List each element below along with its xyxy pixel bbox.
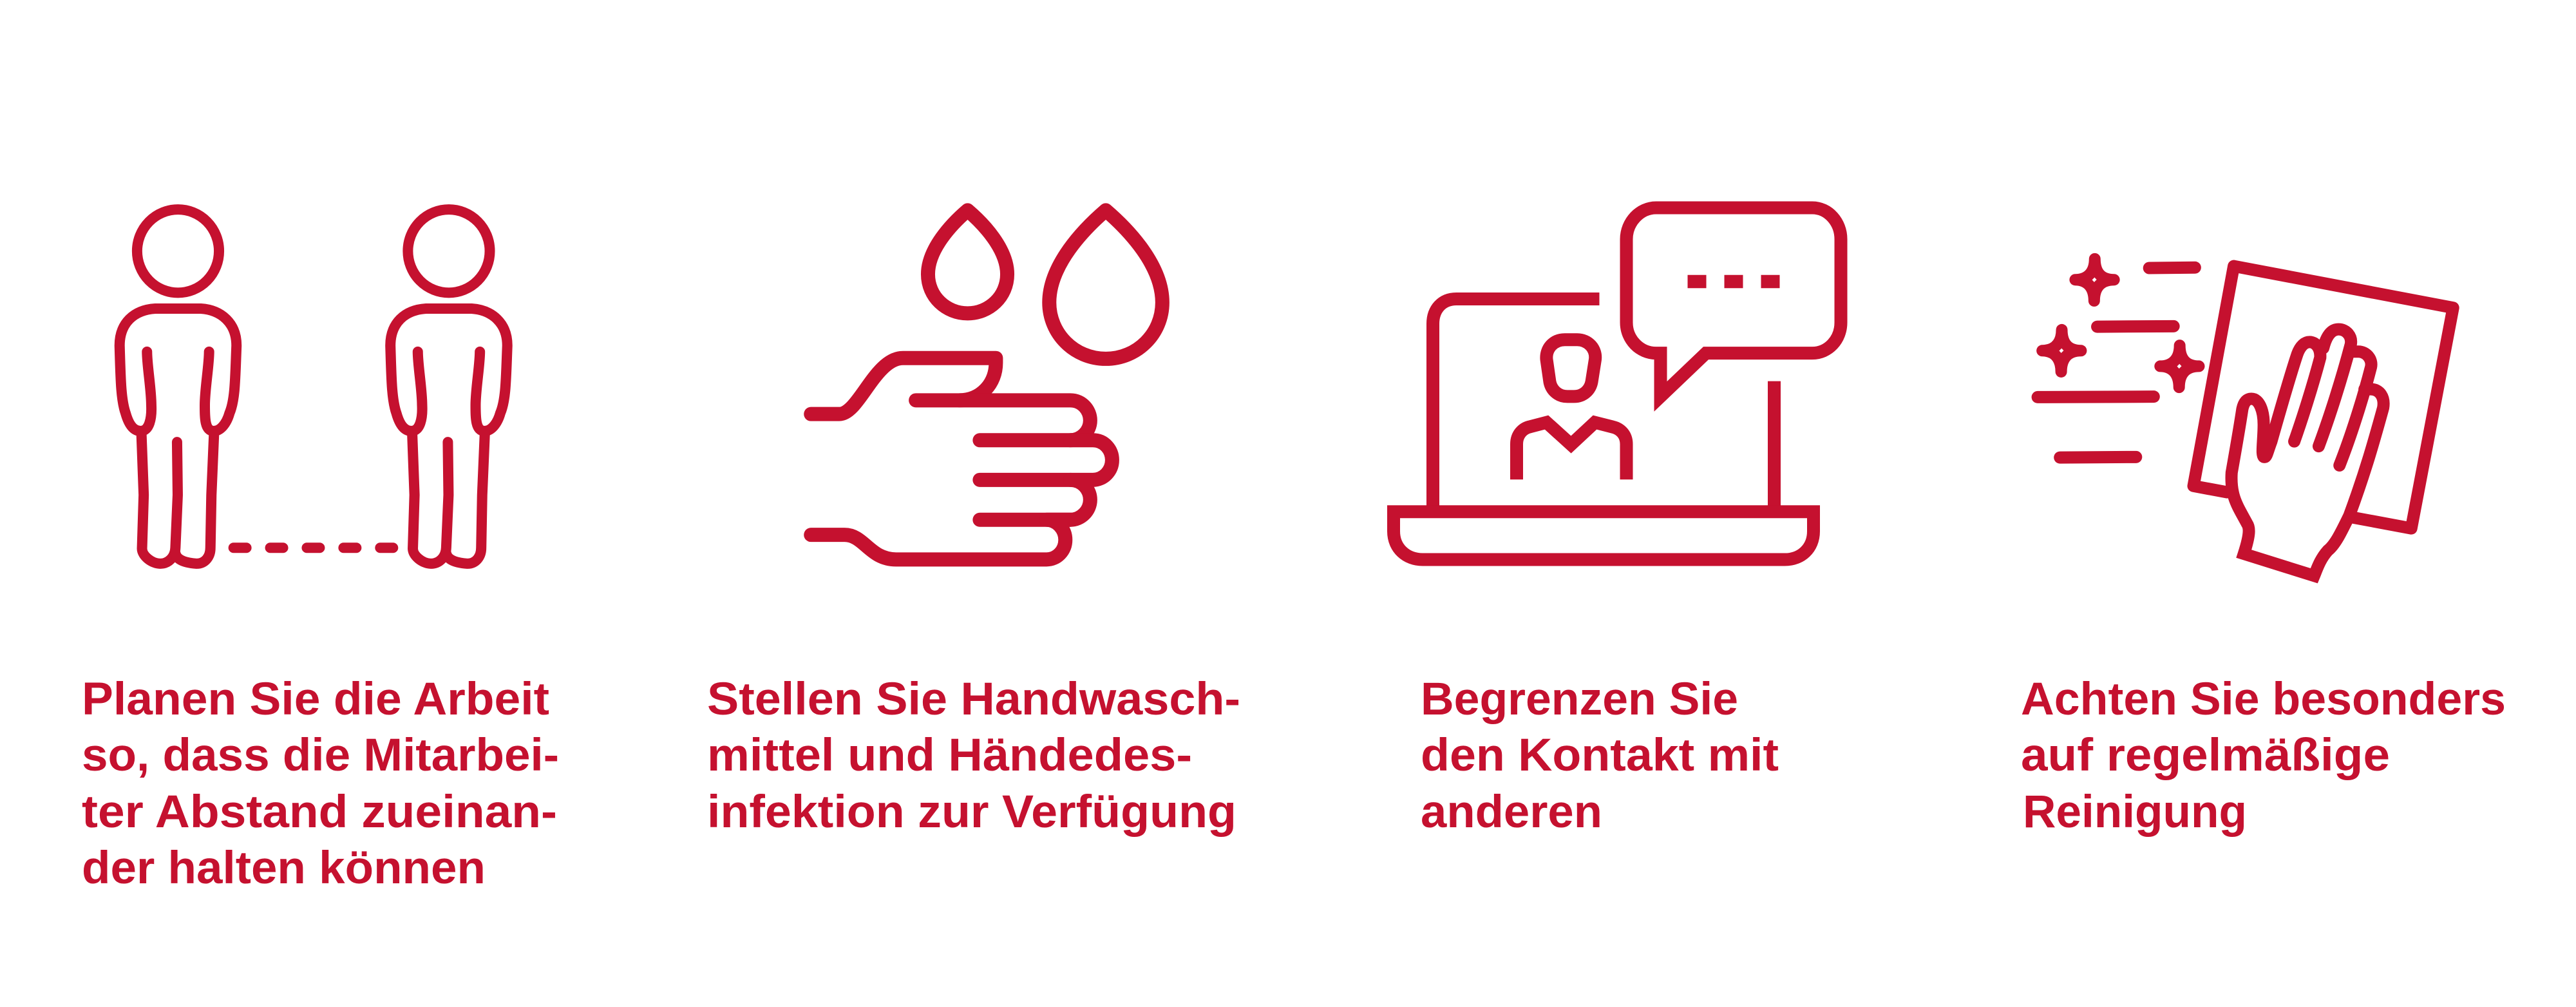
text: regular cleaning: auf regelmäßige [2021,730,2390,781]
text: regular cleaning: Reinigung [2023,787,2247,838]
icon: two people keeping distance [120,209,507,564]
icon: laptop with person and speech bubble [1394,207,1841,560]
text: limit contact: Begrenzen Sie [1421,674,1738,725]
text: plan work with distance: Planen Sie die Arbeit [82,674,549,725]
text: limit contact [1421,674,1779,838]
text: limit contact: anderen [1421,787,1602,838]
text: provide hand wash and disinfectant: infektion zur Verfügung [707,787,1236,838]
text: regular cleaning [2021,674,2506,838]
text: provide hand wash and disinfectant: Stellen Sie Handwasch- [707,674,1240,725]
text: plan work with distance [82,674,559,894]
text: plan work with distance: ter Abstand zueinan- [82,787,557,838]
icon: hand with water drops [811,210,1162,559]
text: regular cleaning: Achten Sie besonders [2021,674,2506,725]
text: provide hand wash and disinfectant [707,674,1240,838]
text: plan work with distance: so, dass die Mitarbei- [82,730,559,781]
text: provide hand wash and disinfectant: mittel und Händedes- [707,730,1192,781]
icon: hand wiping with cloth and sparkles [2038,259,2453,576]
text: limit contact: den Kontakt mit [1421,730,1779,781]
text: plan work with distance: der halten können [82,843,486,894]
